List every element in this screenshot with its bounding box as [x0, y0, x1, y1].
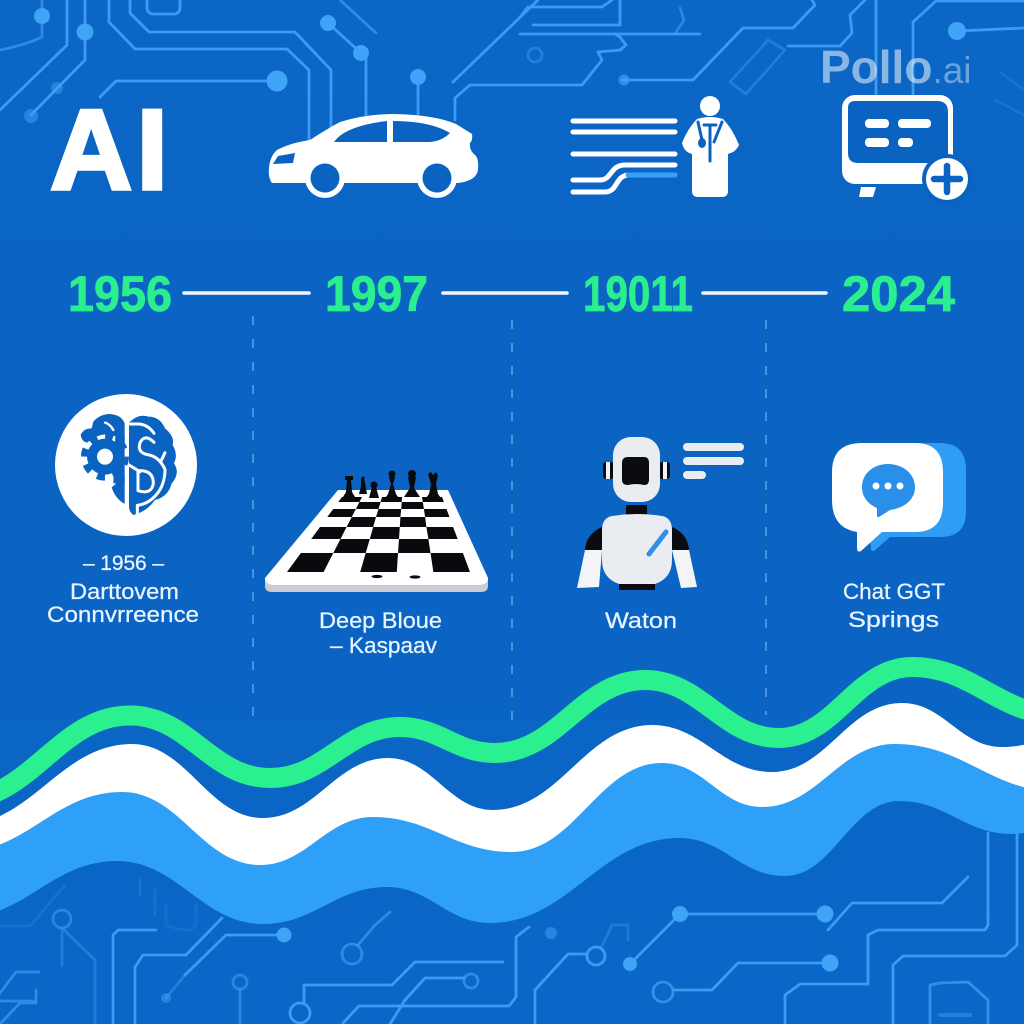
icon: brain in white circle	[55, 394, 197, 536]
timeline: years and connectors: 19011	[583, 266, 693, 322]
chess pieces	[343, 470, 441, 500]
label: ChatGPT springs	[843, 579, 945, 632]
label: Deep Blue vs Kasparov: – Kaspaav	[330, 633, 437, 658]
icon: robot with speech lines	[577, 437, 744, 590]
label: Dartmouth conference	[47, 552, 199, 627]
label: Dartmouth conference: – 1956 –	[83, 552, 164, 575]
label: ChatGPT springs: Chat GGT	[843, 579, 945, 604]
timeline: years and connectors: 1956	[68, 266, 172, 322]
label: Dartmouth conference: Darttovem	[70, 579, 179, 604]
heading: AI: AI	[50, 87, 172, 214]
label: Deep Blue vs Kasparov	[319, 608, 442, 658]
watermark: Pollo.ai: Pollo.ai	[820, 41, 972, 93]
white wave	[0, 703, 1024, 890]
icon: doctor with data lines	[573, 96, 739, 197]
label: ChatGPT springs: Springs	[848, 607, 939, 632]
light blue wave	[0, 744, 1024, 924]
timeline: years and connectors	[68, 266, 955, 322]
label: Deep Blue vs Kasparov: Deep Bloue	[319, 608, 442, 633]
label: Watson: Waton	[605, 608, 677, 633]
icon: chat bubbles	[832, 443, 966, 552]
background circuit traces: bottom	[0, 833, 1017, 1024]
background circuit traces: top	[0, 0, 1024, 140]
timeline: years and connectors: 2024	[842, 266, 955, 322]
icon: car	[269, 114, 478, 198]
icon: monitor with plus	[842, 95, 972, 204]
waves: white, blue and green ribbons	[0, 667, 1024, 924]
label: Dartmouth conference: Connvrreence	[47, 602, 199, 627]
icon: chessboard	[265, 470, 488, 592]
timeline: years and connectors: 1997	[325, 266, 428, 322]
vertical dashed dividers	[253, 316, 766, 730]
green wave	[0, 667, 1024, 800]
